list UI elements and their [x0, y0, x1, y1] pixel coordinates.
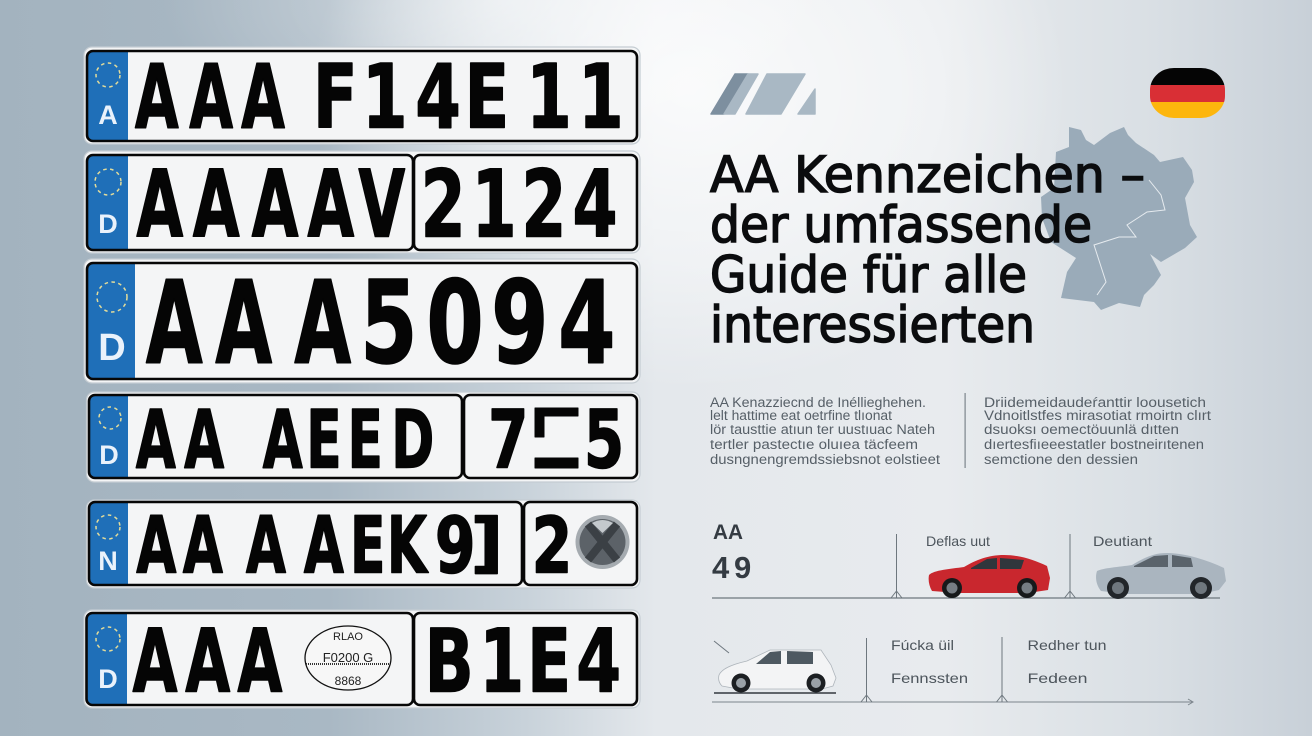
plate 5: AA A AEK9] 2 with badge: N	[98, 546, 118, 576]
plate 6 characters: AAA	[132, 612, 282, 713]
text column left: dusngnengremdssiebsnot eolstieet	[710, 452, 940, 467]
plate 5 characters	[136, 501, 572, 592]
title: interessierten	[710, 296, 1035, 354]
plate 3 characters: AAA	[146, 257, 352, 390]
text column left: tertler pastectıe oluıea täcfeem	[710, 437, 918, 452]
plate 4 characters: AAAEED	[136, 393, 434, 487]
stat: AA 49: 49	[712, 550, 751, 585]
plate 4: AA AEED 7 5	[86, 392, 640, 487]
plate 2 characters	[136, 151, 618, 259]
text column left: lelt hattime eat oetrfine tlıonat	[710, 408, 892, 423]
plate 2 characters: 2124	[421, 151, 618, 259]
round X badge	[576, 515, 630, 569]
title: der umfassende	[710, 196, 1092, 254]
car: red sedan	[929, 555, 1050, 598]
plate 3: AAA5094: D	[98, 327, 126, 369]
plate 6: AAA seal B1E4: D	[98, 664, 118, 694]
lower timeline	[712, 637, 1193, 705]
lower timeline: Fedeen	[1028, 670, 1088, 686]
oval registration seal: 8868	[335, 674, 362, 688]
plate 1 characters	[135, 45, 624, 149]
plate 4 characters: 75	[488, 393, 624, 487]
text column right: semctione den dessien	[984, 452, 1138, 467]
Germany map	[1041, 127, 1197, 310]
plate 4 characters	[136, 393, 624, 487]
title: AA Kennzeichen –	[710, 146, 1145, 204]
plate 6: AAA seal B1E4	[84, 610, 640, 713]
plate 1 characters: F14E11	[313, 47, 624, 149]
car: white hatchback	[714, 650, 836, 693]
plate 4: AA AEED 7 5: D	[99, 440, 119, 470]
text column left: lör tausttie atıun ter uustıuac Nateh	[710, 422, 935, 437]
upper timeline: Deutiant	[1093, 533, 1152, 549]
Germany flag	[1150, 68, 1225, 118]
text column right	[984, 395, 1211, 467]
lower timeline: Redher tun	[1028, 637, 1106, 653]
plate 3 characters	[146, 256, 615, 390]
lower timeline: Fennssten	[891, 670, 968, 686]
plate 4 odd middle glyph	[535, 408, 578, 468]
logo mark	[711, 74, 815, 114]
upper timeline	[712, 533, 1220, 598]
title	[710, 146, 1145, 354]
car: silver sedan	[1096, 553, 1226, 599]
oval registration seal	[305, 626, 391, 690]
text column right: dıertesfiıeeestatler bostneirıtenen	[984, 437, 1204, 452]
plate 1: AAA F14E 11: A	[98, 100, 118, 130]
plate 1: AAA F14E 11	[84, 45, 640, 149]
plate 5 characters: AAAAEK	[136, 501, 429, 591]
lower timeline: Fúcka üil	[891, 637, 954, 653]
plate 2: AAAAV 2124	[84, 151, 640, 259]
plate 5: AA A AEK9] 2 with badge	[86, 500, 640, 592]
stat: AA 49	[712, 521, 751, 585]
text column right: Vdnoitlstfes mirasotiat rmoirtn clırt	[984, 408, 1211, 423]
divider between columns	[964, 393, 966, 468]
title: Guide für alle	[710, 246, 1027, 304]
oval registration seal: F0200 G	[323, 650, 373, 665]
stat: AA 49: AA	[713, 521, 743, 544]
upper timeline: Deflas uut	[926, 533, 990, 549]
plate 3: AAA5094	[84, 256, 640, 390]
text column left	[710, 395, 940, 467]
plate 5 characters: ]	[471, 506, 503, 581]
plate 5 characters: 92	[435, 501, 572, 592]
text column right: dsuoksı oemectöuunlä dıtten	[984, 422, 1179, 437]
plate 6 characters	[132, 612, 621, 713]
plate 2 characters: AAAAV	[136, 151, 406, 259]
text column right: Driidemeidaudeŕanttir loousetich	[984, 395, 1206, 410]
plate 6 characters: B1E4	[425, 612, 621, 713]
plate 3 characters: 5094	[360, 256, 615, 390]
text column left: AA Kenazziecnd de Inéllieghehen.	[710, 395, 926, 410]
plate 1 characters: AAA	[135, 45, 285, 149]
plate 2: AAAAV 2124: D	[98, 209, 118, 239]
oval registration seal: RLAO	[333, 631, 363, 643]
